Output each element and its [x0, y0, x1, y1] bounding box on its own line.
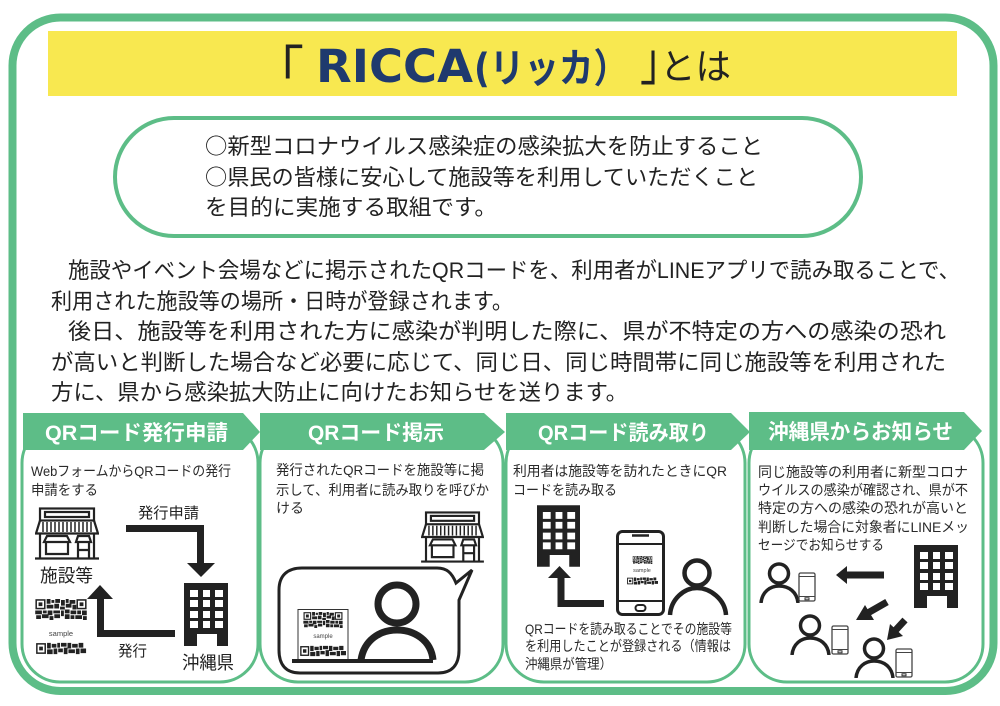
panel: QR code display: 示して、利用者に読み取りを呼びか [276, 482, 489, 498]
panel: QR code application: QRコード発行申請 [45, 422, 228, 445]
panel: QR code application: 沖縄県 [182, 653, 234, 673]
title band: RICCA [316, 40, 473, 93]
title band: (リッカ） [474, 46, 628, 92]
title band [48, 19, 957, 104]
panel: QR code application: 発行 [118, 643, 147, 660]
panel: QR code application: 施設等 [40, 566, 93, 586]
panel: QR code scanning: コードを読み取る [513, 482, 617, 498]
panel: QR code display: 発行されたQRコードを施設等に掲 [276, 462, 484, 478]
panel: notification from Okinawa Prefecture: 同じ施設等の利用者に新型コロナ [758, 464, 968, 480]
panel: notification from Okinawa Prefecture: 判断した場合に対象者にLINEメッ [758, 519, 969, 535]
purpose pill: ○新型コロナウイルス感染症の感染拡大を防止すること [205, 129, 763, 161]
description paragraph: が高いと判断した場合など必要に応じて、同じ日、同じ時間帯に同じ施設等を利用された [51, 350, 946, 375]
panel: QR code application: sample [49, 629, 73, 638]
description paragraph: 後日、施設等を利用された方に感染が判明した際に、県が不特定の方への感染の恐れ [68, 319, 946, 344]
panel: QR code scanning: QRコードを読み取ることでその施設等 [525, 621, 732, 637]
panel: QR code display: QRコード掲示 [308, 422, 444, 445]
panel: QR code application: 申請をする [31, 482, 98, 498]
purpose pill: ○県民の皆様に安心して施設等を利用していただくこと [205, 160, 758, 192]
panel: notification from Okinawa Prefecture: ウイルスの感染が確認され、県が不 [758, 482, 968, 498]
title band: 」 [640, 19, 682, 95]
description paragraph: 利用された施設等の場所・日時が登録されます。 [51, 289, 513, 314]
panel: QR code display [260, 413, 505, 682]
panel: QR code scanning: sample [633, 568, 651, 574]
purpose pill: を目的に実施する取組です。 [205, 195, 497, 220]
purpose pill [115, 118, 861, 236]
panel: notification from Okinawa Prefecture [749, 412, 983, 682]
panel: QR code display: ける [276, 500, 304, 516]
panel: QR code scanning: QRコード読み取り [538, 422, 709, 445]
panel: QR code display: sample [313, 634, 333, 640]
description paragraph: 方に、県から感染拡大防止に向けたお知らせを送ります。 [51, 380, 628, 405]
panel: QR code application: WebフォームからQRコードの発行 [31, 463, 231, 479]
description paragraph: 施設やイベント会場などに掲示されたQRコードを、利用者がLINEアプリで読み取ることで、 [68, 258, 960, 283]
panel: notification from Okinawa Prefecture: 特定の方への感染の恐れが高いと [758, 500, 968, 516]
panel: QR code scanning: 沖縄県が管理） [525, 656, 612, 672]
panel: notification from Okinawa Prefecture: 沖縄県からお知らせ [768, 421, 953, 444]
panel: QR code application [22, 413, 260, 682]
panel: QR code application: 発行申請 [138, 505, 199, 522]
panel: QR code scanning [506, 413, 750, 682]
description paragraph [51, 258, 960, 405]
panel: QR code scanning: を利用したことが登録される（情報は [525, 638, 731, 654]
title band: 「 [252, 29, 304, 104]
title band: とは [660, 46, 731, 87]
panel: QR code scanning: 利用者は施設等を訪れたときにQR [513, 463, 727, 479]
panel: notification from Okinawa Prefecture: セージでお知らせする [758, 537, 884, 553]
